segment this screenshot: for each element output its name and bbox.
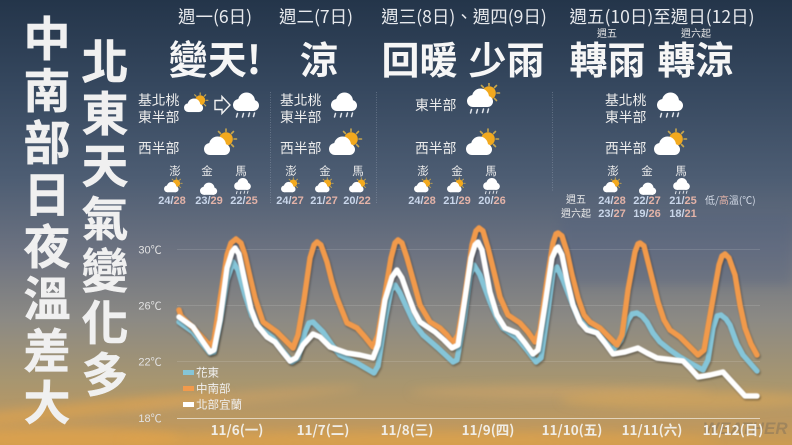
panel: Monday forecast <box>138 89 259 207</box>
note: Friday: 週五 <box>597 25 617 40</box>
islands labels: 馬 <box>352 163 364 179</box>
icon: west sun and cloud <box>654 129 686 155</box>
temperatures: 28 <box>174 195 186 207</box>
temperatures: 21/ <box>310 195 326 207</box>
axis labels: 30℃ <box>138 244 162 256</box>
temperatures: 24/ <box>276 195 292 207</box>
unit note: 低/高溫(℃) <box>705 192 756 207</box>
heading: Wednesday and Thursday: 週三(8日)、週四(9日) <box>381 4 547 29</box>
headline: 回暖: 回暖 <box>381 30 458 85</box>
temperatures: 19/ <box>633 208 649 220</box>
icon: Penghu <box>414 178 432 192</box>
temperatures: 22/ <box>230 195 246 207</box>
panel: Wednesday and Thursday forecast <box>408 83 506 207</box>
date labels: 11/10(五) <box>542 419 602 439</box>
panel: Friday to Sunday forecast <box>561 89 756 220</box>
date labels: 11/8(三) <box>381 419 433 439</box>
temperatures: 20/ <box>478 195 494 207</box>
labels: regions: 西半部 <box>605 137 647 157</box>
islands labels: 金 <box>201 163 213 179</box>
islands labels: 澎 <box>285 163 297 179</box>
line chart: temperature <box>138 228 788 439</box>
islands labels: 金 <box>641 163 653 179</box>
labels: regions: 東半部 <box>138 106 180 126</box>
labels: regions: 西半部 <box>280 137 322 157</box>
headline: 變天!: 變天! <box>169 30 261 86</box>
legend <box>183 364 242 412</box>
title: 北東天氣變化多: 北東天氣變化多 <box>82 24 128 406</box>
labels: regions: 東半部 <box>280 106 322 126</box>
headline: 涼: 涼 <box>300 30 338 85</box>
temperatures: 27 <box>326 195 338 207</box>
row labels: 週五 <box>566 191 586 206</box>
icon: west sun and cloud <box>466 129 498 155</box>
islands labels: 澎 <box>169 163 181 179</box>
icon: west sun and cloud <box>204 129 236 155</box>
temperatures: 18/ <box>669 208 685 220</box>
icon: Kinmen <box>200 183 217 195</box>
legend item: 北部宜蘭: 北部宜蘭 <box>196 396 242 412</box>
temperatures: 23/ <box>598 208 614 220</box>
legend item: 花東: 花東 <box>196 364 219 380</box>
temperatures: 27 <box>292 195 304 207</box>
temperatures: 28 <box>424 195 436 207</box>
title: 中南部日夜溫差大: 中南部日夜溫差大 <box>24 1 70 434</box>
labels: regions: 西半部 <box>138 137 180 157</box>
islands labels: 金 <box>451 163 463 179</box>
labels: regions: 基北桃 <box>605 89 647 109</box>
temperatures: 29 <box>211 195 223 207</box>
temperatures: 25 <box>685 195 697 207</box>
heading: Tuesday: 週二(7日) <box>279 4 353 29</box>
temperatures: 26 <box>494 195 506 207</box>
day headings <box>178 4 755 40</box>
panel: Tuesday forecast <box>276 89 371 207</box>
icon: Matsu <box>483 178 500 194</box>
temperatures: 25 <box>246 195 258 207</box>
headline: 轉涼: 轉涼 <box>657 30 734 85</box>
headline words <box>169 30 734 86</box>
axis labels: 26℃ <box>138 300 162 312</box>
temperatures: 27 <box>649 195 661 207</box>
temperatures: 27 <box>614 208 626 220</box>
temperatures: 24/ <box>408 195 424 207</box>
temperatures: 22/ <box>633 195 649 207</box>
islands labels: 澎 <box>607 163 619 179</box>
labels: regions: 東半部 <box>605 106 647 126</box>
date labels: 11/6(一) <box>211 419 263 439</box>
labels: regions: 基北桃 <box>138 89 180 109</box>
icon: west sun and cloud <box>329 129 362 155</box>
icon: Matsu <box>234 178 251 194</box>
line: 中南部 <box>179 228 758 356</box>
temperatures: 28 <box>614 195 626 207</box>
temperatures: 24/ <box>158 195 174 207</box>
islands labels: 馬 <box>485 163 497 179</box>
temperatures: 26 <box>649 208 661 220</box>
icon: rain cloud <box>331 92 357 117</box>
icon: Matsu <box>673 178 690 194</box>
icon: sun cloud with rain <box>467 83 500 113</box>
line: 花東 <box>179 262 758 374</box>
note: from Saturday: 週六起 <box>681 25 711 40</box>
icon: Kinmen <box>315 178 333 192</box>
temperatures: 20/ <box>343 195 359 207</box>
labels: regions: 基北桃 <box>280 89 322 109</box>
column dividers <box>270 92 552 204</box>
temperatures: 21/ <box>443 195 459 207</box>
line: 北部宜蘭 <box>179 242 758 398</box>
headline: 轉雨: 轉雨 <box>569 30 646 85</box>
row labels: 週六起 <box>561 205 591 220</box>
islands labels: 金 <box>319 163 331 179</box>
islands labels: 澎 <box>417 163 429 179</box>
temperatures: 22 <box>359 195 371 207</box>
headline: 少雨: 少雨 <box>468 30 545 85</box>
icon: Kinmen <box>639 183 656 195</box>
temperatures: 21 <box>685 208 697 220</box>
islands labels: 馬 <box>675 163 687 179</box>
date labels: 11/9(四) <box>462 419 514 439</box>
icon: Matsu <box>349 178 367 192</box>
icon: arrow <box>215 96 230 114</box>
axis labels: 22℃ <box>138 356 162 368</box>
heading: Monday: 週一(6日) <box>178 4 252 29</box>
temperatures: 21/ <box>669 195 685 207</box>
date labels: 11/12(日) <box>703 419 763 439</box>
icon: Penghu <box>164 178 182 192</box>
islands labels: 馬 <box>235 163 247 179</box>
icon: Penghu <box>603 178 621 192</box>
icon: sun and cloud <box>184 93 208 112</box>
heading: Friday to Sunday: 週五(10日)至週日(12日) <box>569 4 755 29</box>
temperatures: 29 <box>459 195 471 207</box>
temperatures: 24/ <box>598 195 614 207</box>
watermark: WEATHER <box>703 419 788 438</box>
legend item: 中南部: 中南部 <box>196 380 230 396</box>
axis labels: 18℃ <box>138 413 162 425</box>
date labels: 11/7(二) <box>297 419 349 439</box>
date labels: 11/11(六) <box>622 419 682 439</box>
temperatures: 23/ <box>195 195 211 207</box>
icon: Penghu <box>281 178 299 192</box>
labels: regions: 西半部 <box>415 137 457 157</box>
icon: rain cloud <box>233 92 259 117</box>
icon: Kinmen <box>447 178 465 192</box>
icon: rain cloud <box>657 92 683 117</box>
labels: regions: 東半部 <box>415 94 457 114</box>
